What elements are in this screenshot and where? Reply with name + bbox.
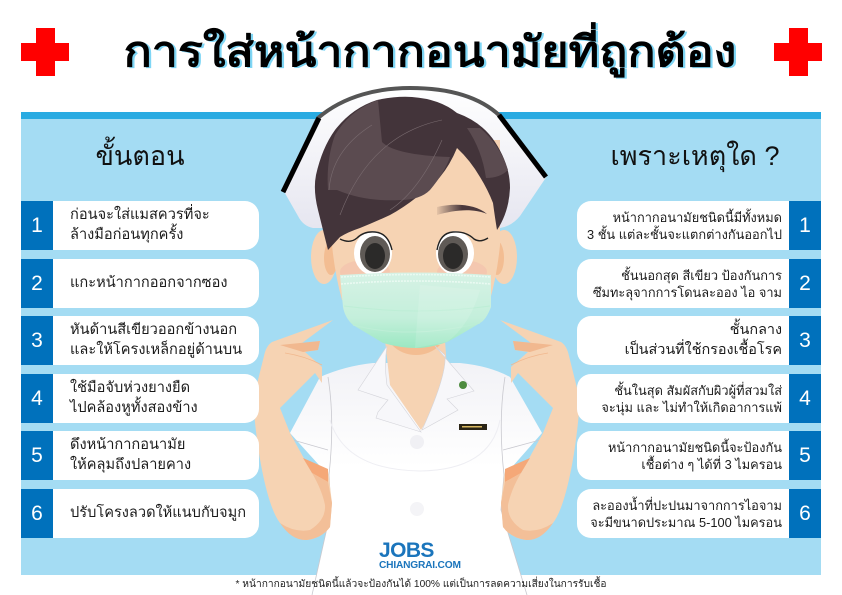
step 3 (21, 316, 259, 365)
reason 3: 3 (799, 329, 811, 352)
step 6: ปรับโครงลวดให้แนบกับจมูก (70, 505, 246, 521)
reason 6 (577, 489, 821, 538)
step 4: 4 (31, 387, 43, 410)
cross icon: right (774, 28, 822, 76)
reason 1: หน้ากากอนามัยชนิดนี้มีทั้งหมด (613, 210, 782, 224)
reason 3 (577, 316, 821, 365)
step 5: ดึงหน้ากากอนามัย (70, 437, 185, 453)
reason 4: จะนุ่ม และ ไม่ทำให้เกิดอาการแพ้ (601, 400, 782, 414)
step 4: ใช้มือจับห่วงยางยืด (70, 380, 190, 396)
reason 1: 3 ชั้น แต่ละชั้นจะแตกต่างกันออกไป (587, 226, 782, 242)
step 3: 3 (31, 329, 43, 352)
reason 2: ซึมทะลุจากการโดนละออง ไอ จาม (593, 284, 782, 300)
reason 2: 2 (799, 272, 811, 295)
reason 2 (577, 259, 821, 308)
surgical mask (340, 272, 491, 348)
reason 6: ละอองน้ำที่ปะปนมาจากการไอจาม (592, 498, 782, 512)
reason 4: 4 (799, 387, 811, 410)
reason 4: ชั้นในสุด สัมผัสกับผิวผู้ที่สวมใส่ (614, 382, 782, 398)
step 1: ล้างมือก่อนทุกครั้ง (70, 226, 183, 242)
step 2 (21, 259, 259, 308)
step 3: หันด้านสีเขียวออกข้างนอก (70, 322, 237, 338)
step 2: แกะหน้ากากออกจากซอง (70, 275, 227, 291)
heading: reasons: เพราะเหตุใด ? (610, 141, 780, 171)
reason 6: 6 (799, 502, 811, 525)
reason 5 (577, 431, 821, 480)
reason 4 (577, 374, 821, 423)
step 1: 1 (31, 214, 43, 237)
step 4 (21, 374, 259, 423)
arm: left (253, 320, 333, 540)
footnote: * หน้ากากอนามัยชนิดนี้แล้วจะป้องกันได้ 100% แต่เป็นการลดความเสี่ยงในการรับเชื้อ (236, 579, 606, 590)
reason 1: 1 (799, 214, 811, 237)
cross icon: left (21, 28, 69, 76)
step 2: 2 (31, 272, 43, 295)
face (332, 140, 500, 300)
step 5: 5 (31, 444, 43, 467)
eyes (340, 231, 488, 275)
neck and collar (358, 340, 474, 432)
step 5 (21, 431, 259, 480)
logo: JOBS Chiangrai: JOBS (379, 539, 434, 562)
pin and name badge (459, 381, 487, 430)
title: การใส่หน้ากากอนามัยที่ถูกต้อง (124, 28, 736, 75)
reason 5: หน้ากากอนามัยชนิดนี้จะป้องกัน (608, 440, 782, 454)
reason 5: เชื้อต่าง ๆ ได้ที่ 3 ไมครอน (641, 456, 782, 472)
logo: JOBS Chiangrai (379, 539, 461, 571)
cap (282, 87, 547, 228)
step 6: 6 (31, 502, 43, 525)
reason 5: 5 (799, 444, 811, 467)
step 1: ก่อนจะใส่แมสควรที่จะ (70, 207, 210, 223)
arm: right (500, 320, 580, 540)
step 5: ให้คลุมถึงปลายคาง (70, 456, 191, 472)
reason 3: เป็นส่วนที่ใช้กรองเชื้อโรค (625, 342, 782, 358)
step 3: และให้โครงเหล็กอยู่ด้านบน (70, 342, 242, 358)
reason 6: จะมีขนาดประมาณ 5-100 ไมครอน (590, 514, 782, 530)
panel: background (21, 112, 821, 575)
step 6 (21, 489, 259, 538)
logo: JOBS Chiangrai: CHIANGRAI.COM (379, 560, 461, 571)
step 1 (21, 201, 259, 250)
reason 1 (577, 201, 821, 250)
reason 3: ชั้นกลาง (730, 322, 782, 338)
step 4: ไปคล้องหูทั้งสองข้าง (70, 400, 198, 416)
heading: steps: ขั้นตอน (95, 141, 185, 171)
ears (311, 230, 517, 284)
shirt (290, 363, 542, 595)
reason 2: ชั้นนอกสุด สีเขียว ป้องกันการ (621, 268, 782, 282)
hair (315, 97, 510, 250)
